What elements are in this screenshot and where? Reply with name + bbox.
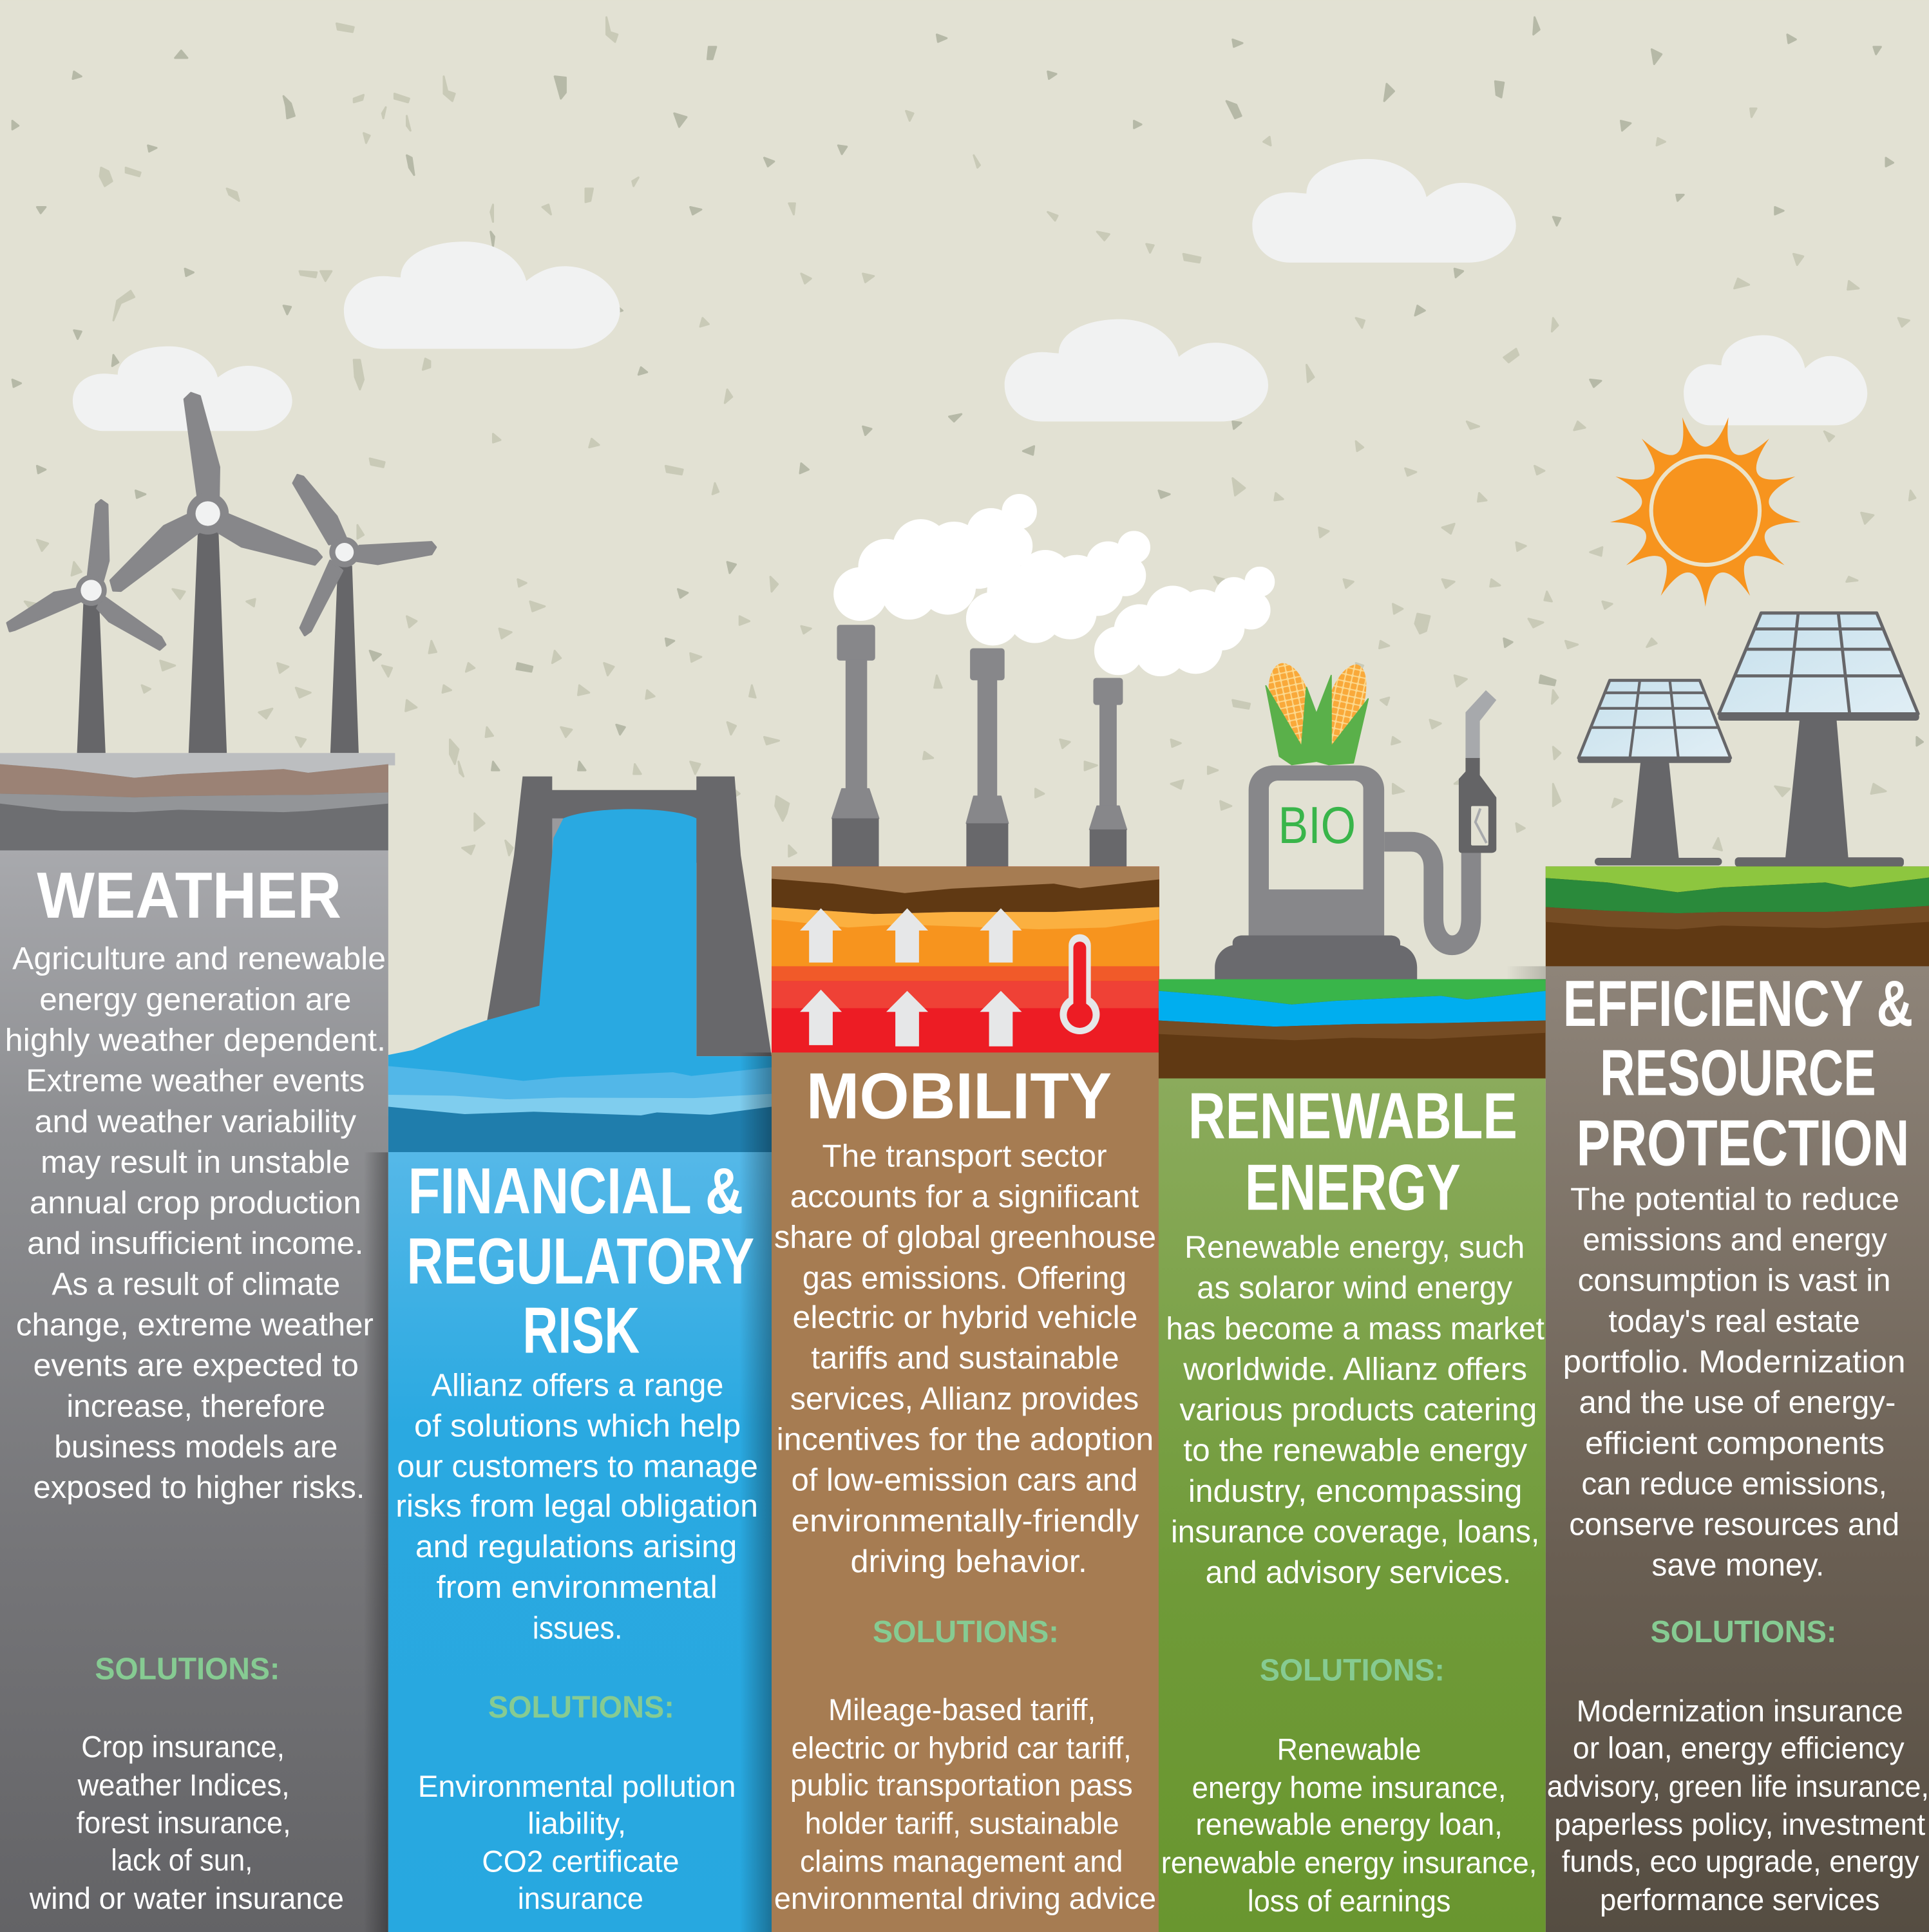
icon: solar panel large xyxy=(1718,613,1919,867)
financial solutions list: Environmental pollution xyxy=(418,1770,736,1803)
weather body text: Agriculture and renewable xyxy=(12,942,386,976)
icon: bio fuel pump with corn xyxy=(1215,663,1496,979)
heading: financial and regulatory risk: FINANCIAL & xyxy=(408,1155,743,1227)
weather solutions list: wind or water insurance xyxy=(29,1882,344,1915)
pump body xyxy=(1249,765,1384,979)
financial body text: from environmental xyxy=(436,1570,717,1605)
panel: financial and regulatory risk xyxy=(388,1052,772,1932)
arrows: rising heat xyxy=(800,908,1022,1046)
financial body text: of solutions which help xyxy=(414,1408,741,1443)
efficiency solutions list: Modernization insurance xyxy=(1577,1694,1903,1728)
weather body text: annual crop production xyxy=(30,1186,361,1220)
mobility body text: incentives for the adoption xyxy=(777,1423,1154,1457)
renewable body text: industry, encompassing xyxy=(1188,1474,1522,1509)
efficiency body text: consumption is vast in xyxy=(1578,1264,1891,1298)
corn cobs xyxy=(1266,663,1368,764)
shadow cast by efficiency panel xyxy=(1506,966,1546,980)
cloud above weather xyxy=(73,346,292,431)
heading: financial and regulatory risk xyxy=(407,1155,754,1367)
weather solutions label: SOLUTIONS: xyxy=(95,1652,280,1686)
efficiency body text: efficient components xyxy=(1585,1426,1885,1461)
financial body text: risks from legal obligation xyxy=(395,1489,758,1524)
weather solutions list: weather Indices, xyxy=(77,1768,290,1802)
efficiency solutions list xyxy=(1547,1694,1929,1917)
mobility body text: services, Allianz provides xyxy=(790,1381,1139,1416)
financial solutions list xyxy=(418,1770,736,1915)
financial body text: issues. xyxy=(533,1611,622,1645)
weather body text: As a result of climate xyxy=(52,1267,340,1302)
heading: renewable energy: RENEWABLE xyxy=(1188,1079,1517,1152)
weather body text: and insufficient income. xyxy=(27,1226,364,1261)
efficiency solutions list: or loan, energy efficiency xyxy=(1573,1732,1905,1765)
renewable solutions list: loss of earnings xyxy=(1248,1884,1450,1918)
efficiency solutions list: funds, eco upgrade, energy xyxy=(1562,1845,1919,1879)
efficiency body text: save money. xyxy=(1651,1548,1824,1583)
mobility body text: accounts for a significant xyxy=(790,1180,1139,1215)
mobility panel background xyxy=(772,1052,1159,1932)
mobility body text: environmentally-friendly xyxy=(792,1504,1139,1539)
efficiency body text: today's real estate xyxy=(1608,1304,1860,1339)
panel: weather xyxy=(0,753,395,1932)
renewable body text: as solaror wind energy xyxy=(1197,1271,1513,1305)
financial body text: and regulations arising xyxy=(415,1530,737,1564)
weather body text: may result in unstable xyxy=(41,1145,350,1180)
panel: efficiency and resource protection xyxy=(1546,866,1929,1932)
icon: wind turbines xyxy=(7,393,435,753)
weather body text: highly weather dependent. xyxy=(5,1023,386,1057)
weather body text: energy generation are xyxy=(39,982,351,1017)
heading: weather: WEATHER xyxy=(37,859,341,932)
weather body text: events are expected to xyxy=(33,1349,359,1383)
efficiency body text: and the use of energy- xyxy=(1579,1385,1896,1420)
financial solutions label: SOLUTIONS: xyxy=(488,1690,674,1725)
mobility solutions list: environmental driving advice xyxy=(774,1882,1156,1915)
weather solutions list: forest insurance, xyxy=(77,1806,291,1839)
mobility solutions list: public transportation pass xyxy=(790,1768,1133,1802)
financial body text: Allianz offers a range xyxy=(432,1368,723,1403)
renewable solutions label: SOLUTIONS: xyxy=(1260,1653,1445,1687)
icon: hydro dam with waterfall xyxy=(388,777,772,1091)
efficiency body text: conserve resources and xyxy=(1569,1508,1899,1542)
cloud 4 xyxy=(1252,159,1516,263)
heading: renewable energy xyxy=(1188,1079,1517,1224)
mobility body text: share of global greenhouse xyxy=(774,1220,1156,1255)
efficiency panel background xyxy=(1546,966,1929,1932)
fuel nozzle xyxy=(1459,690,1496,853)
renewable body text: insurance coverage, loans, xyxy=(1171,1515,1539,1549)
mobility solutions list xyxy=(774,1693,1156,1915)
renewable body text: Renewable energy, such xyxy=(1184,1230,1525,1265)
cloud 3 xyxy=(1005,319,1268,422)
weather solutions list: lack of sun, xyxy=(111,1844,252,1877)
financial body text: our customers to manage xyxy=(397,1450,758,1484)
cloud 2 xyxy=(344,242,620,349)
mobility body text: gas emissions. Offering xyxy=(803,1261,1126,1296)
mobility solutions list: Mileage-based tariff, xyxy=(828,1693,1096,1727)
renewable solutions list: Renewable xyxy=(1277,1732,1421,1766)
renewable solutions list: renewable energy insurance, xyxy=(1161,1846,1537,1880)
heading: mobility: MOBILITY xyxy=(806,1060,1112,1133)
renewable ground layers xyxy=(1159,979,1546,1079)
efficiency ground layers xyxy=(1546,866,1929,967)
renewable solutions list: renewable energy loan, xyxy=(1195,1808,1503,1841)
weather panel side shadow xyxy=(364,1152,388,1932)
efficiency solutions list: paperless policy, investment xyxy=(1554,1808,1925,1841)
weather body text: and weather variability xyxy=(35,1104,357,1139)
renewable body text: to the renewable energy xyxy=(1183,1434,1528,1468)
heading: financial and regulatory risk: RISK xyxy=(522,1294,640,1367)
renewable body text: worldwide. Allianz offers xyxy=(1183,1352,1527,1387)
renewable body text xyxy=(1166,1230,1544,1590)
weather body text xyxy=(5,942,386,1505)
weather solutions list xyxy=(29,1730,344,1915)
financial panel side shadow xyxy=(739,1052,772,1932)
renewable solutions list: energy home insurance, xyxy=(1192,1771,1506,1804)
icon: thermometer xyxy=(1060,934,1099,1034)
heading: renewable energy: ENERGY xyxy=(1245,1151,1461,1224)
weather solutions list: Crop insurance, xyxy=(81,1730,285,1764)
mobility solutions label: SOLUTIONS: xyxy=(873,1615,1059,1649)
mobility body text: driving behavior. xyxy=(850,1544,1087,1579)
smoke plumes xyxy=(836,496,1273,674)
label: BIO: BIO xyxy=(1278,797,1356,855)
icon: solar panel small xyxy=(1578,680,1731,866)
financial water layers xyxy=(388,1066,772,1152)
renewable solutions list xyxy=(1161,1732,1537,1918)
mobility body text: electric or hybrid vehicle xyxy=(793,1300,1137,1335)
pump base xyxy=(1215,936,1417,979)
fuel hose xyxy=(1384,842,1471,945)
weather panel background xyxy=(0,850,388,1932)
renewable body text: has become a mass market xyxy=(1166,1311,1544,1346)
financial solutions list: CO2 certificate xyxy=(482,1845,679,1879)
panel: mobility xyxy=(772,866,1159,1932)
renewable body text: various products catering xyxy=(1179,1393,1537,1428)
efficiency body text: The potential to reduce xyxy=(1570,1182,1899,1217)
weather body text: increase, therefore xyxy=(66,1389,325,1424)
background debris flecks xyxy=(12,17,1923,857)
efficiency body text: can reduce emissions, xyxy=(1581,1466,1887,1501)
weather body text: exposed to higher risks. xyxy=(33,1470,365,1505)
heading: efficiency and resource protection xyxy=(1563,967,1913,1179)
efficiency body text xyxy=(1563,1182,1906,1583)
mobility solutions list: holder tariff, sustainable xyxy=(805,1806,1119,1840)
weather body text: change, extreme weather xyxy=(16,1308,374,1343)
efficiency body text: portfolio. Modernization xyxy=(1563,1345,1906,1379)
financial solutions list: liability, xyxy=(527,1806,626,1840)
weather body text: business models are xyxy=(54,1430,337,1464)
financial solutions list: insurance xyxy=(518,1882,643,1915)
financial body text xyxy=(395,1368,758,1645)
mobility solutions list: claims management and xyxy=(800,1845,1123,1879)
mobility body text: of low-emission cars and xyxy=(792,1463,1137,1498)
weather body text: Extreme weather events xyxy=(26,1064,365,1099)
efficiency body text: emissions and energy xyxy=(1582,1222,1888,1257)
financial panel background xyxy=(388,1152,772,1932)
renewable panel background xyxy=(1159,1079,1546,1932)
efficiency solutions list: performance services xyxy=(1600,1883,1879,1917)
panel: renewable energy xyxy=(1159,979,1546,1932)
mobility solutions list: electric or hybrid car tariff, xyxy=(792,1732,1132,1765)
mobility ground layers xyxy=(772,866,1159,1054)
efficiency solutions label: SOLUTIONS: xyxy=(1650,1615,1836,1649)
mobility body text: The transport sector xyxy=(822,1139,1107,1173)
weather ground layers xyxy=(0,753,395,850)
heading: financial and regulatory risk: REGULATORY xyxy=(407,1225,754,1298)
mobility body text: tariffs and sustainable xyxy=(811,1341,1119,1376)
icon: sun xyxy=(1610,417,1801,607)
mobility body text xyxy=(774,1139,1156,1579)
pump display window xyxy=(1269,781,1364,889)
icon: factory chimneys xyxy=(832,625,1126,867)
renewable body text: and advisory services. xyxy=(1206,1555,1511,1590)
cloud above sun xyxy=(1684,336,1867,425)
